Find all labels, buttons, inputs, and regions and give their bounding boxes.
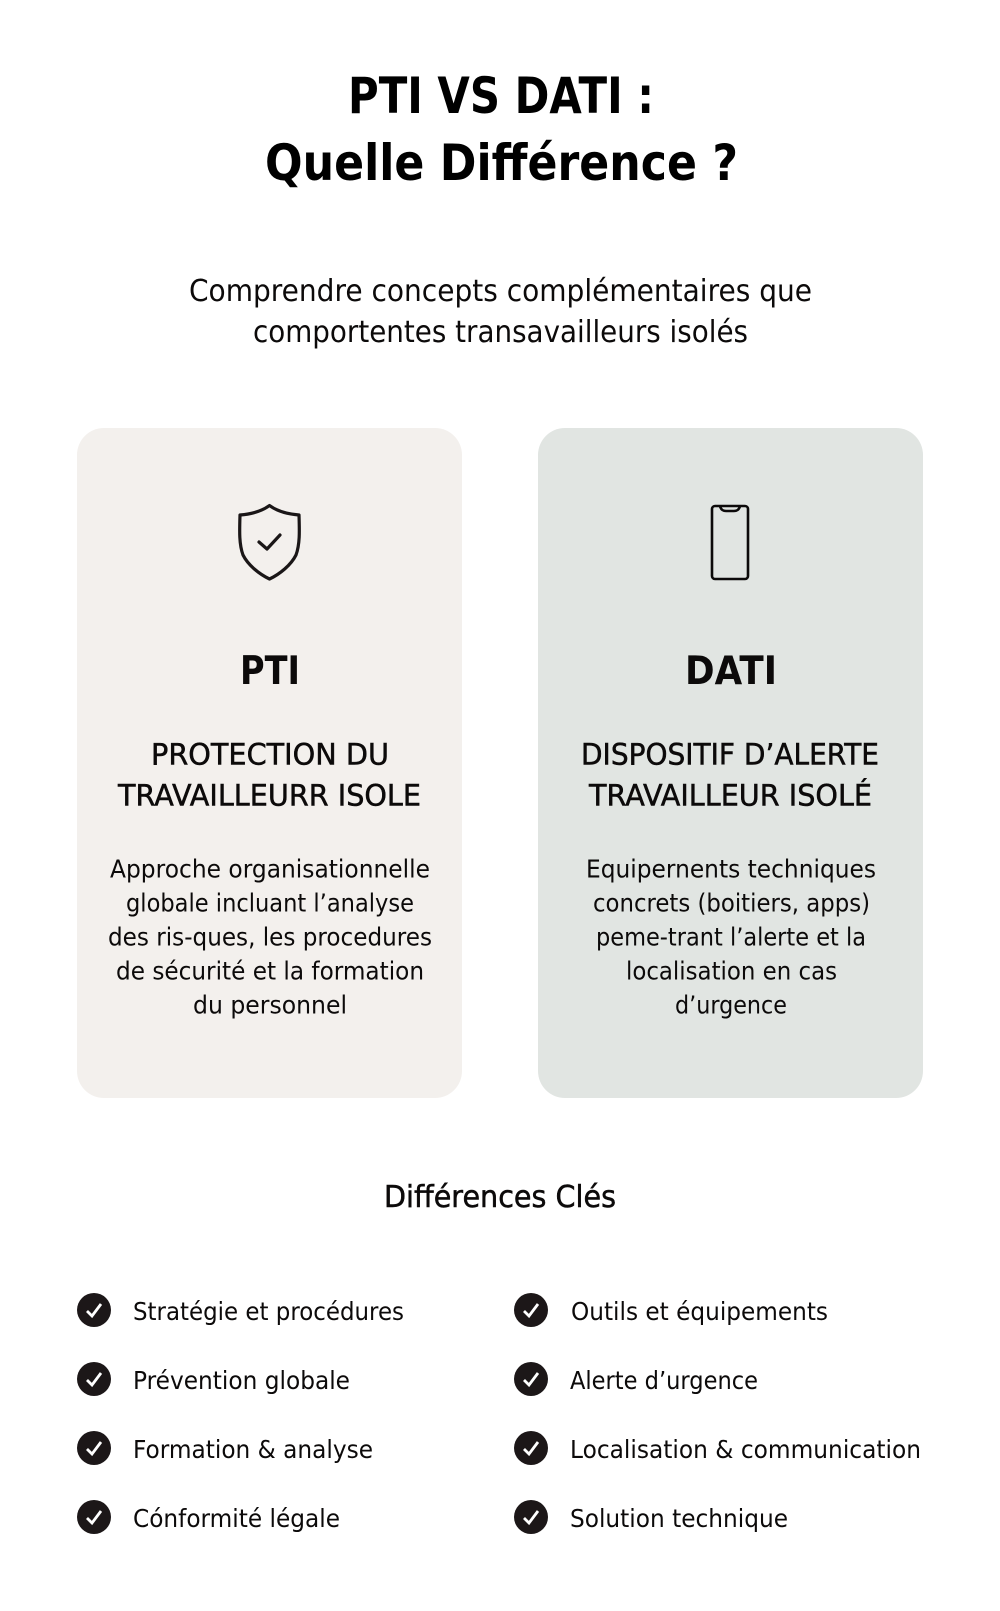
heading: Différences Clés: Différences Clés xyxy=(384,1180,616,1215)
item: Cónformité légale: Cónformité légale xyxy=(133,1504,340,1533)
DATI description: d’urgence xyxy=(675,990,787,1020)
DATI heading: DATI xyxy=(685,649,777,694)
DATI subheading: TRAVAILLEUR ISOLÉ xyxy=(588,778,872,812)
DATI description: localisation en cas xyxy=(626,956,837,986)
PTI description: globale incluant l’analyse xyxy=(126,888,414,918)
item: Solution technique: Solution technique xyxy=(570,1504,788,1533)
list: DATI differences xyxy=(514,1293,921,1534)
PTI subheading: PROTECTION DU xyxy=(151,738,389,772)
subtitle xyxy=(189,274,812,350)
item: Prévention globale: Prévention globale xyxy=(133,1366,350,1395)
item: Localisation & communication xyxy=(514,1431,921,1465)
item: Prévention globale xyxy=(77,1362,350,1396)
PTI description: Approche organisationnelle xyxy=(110,854,430,884)
PTI description xyxy=(108,854,432,1020)
DATI subheading: DISPOSITIF D’ALERTE xyxy=(581,738,879,772)
title: PTI VS DATI : xyxy=(348,67,654,125)
item: Localisation & communication: Localisation & communication xyxy=(570,1435,921,1464)
panel: DATI xyxy=(538,428,923,1098)
subtitle: Comprendre concepts complémentaires que xyxy=(189,274,812,309)
item: Stratégie et procédures xyxy=(77,1293,404,1327)
panel: PTI xyxy=(77,428,462,1098)
title xyxy=(265,67,738,192)
DATI description: concrets (boitiers, apps) xyxy=(593,888,870,918)
item: Alerte d'urgence xyxy=(514,1362,758,1396)
subtitle: comportentes transavailleurs isolés xyxy=(253,315,748,350)
icon: shield with check xyxy=(240,506,299,579)
DATI description: peme-trant l’alerte et la xyxy=(596,922,866,952)
PTI subheading xyxy=(117,738,421,812)
PTI description: de sécurité et la formation xyxy=(116,956,424,986)
list: PTI differences xyxy=(77,1293,404,1534)
DATI description: Equipernents techniques xyxy=(586,854,876,884)
item: Solution technique xyxy=(514,1500,788,1534)
PTI description: des ris-ques, les procedures xyxy=(108,922,432,952)
item: Formation & analyse xyxy=(77,1431,373,1465)
item: Outils et équipements: Outils et équipements xyxy=(571,1297,828,1326)
item: Stratégie et procédures: Stratégie et procédures xyxy=(133,1297,404,1326)
PTI subheading: TRAVAILLEURR ISOLE xyxy=(117,778,421,812)
icon: smartphone xyxy=(712,506,748,579)
item: Formation & analyse: Formation & analyse xyxy=(133,1435,373,1464)
PTI description: du personnel xyxy=(193,990,347,1020)
PTI heading: PTI xyxy=(240,649,300,694)
item: Alerte d'urgence: Alerte d’urgence xyxy=(570,1366,758,1395)
item: Outils et équipements xyxy=(514,1293,828,1327)
DATI subheading xyxy=(581,738,879,812)
DATI description xyxy=(586,854,876,1020)
item: Cónformité légale xyxy=(77,1500,340,1534)
title: Quelle Différence ? xyxy=(265,134,738,192)
